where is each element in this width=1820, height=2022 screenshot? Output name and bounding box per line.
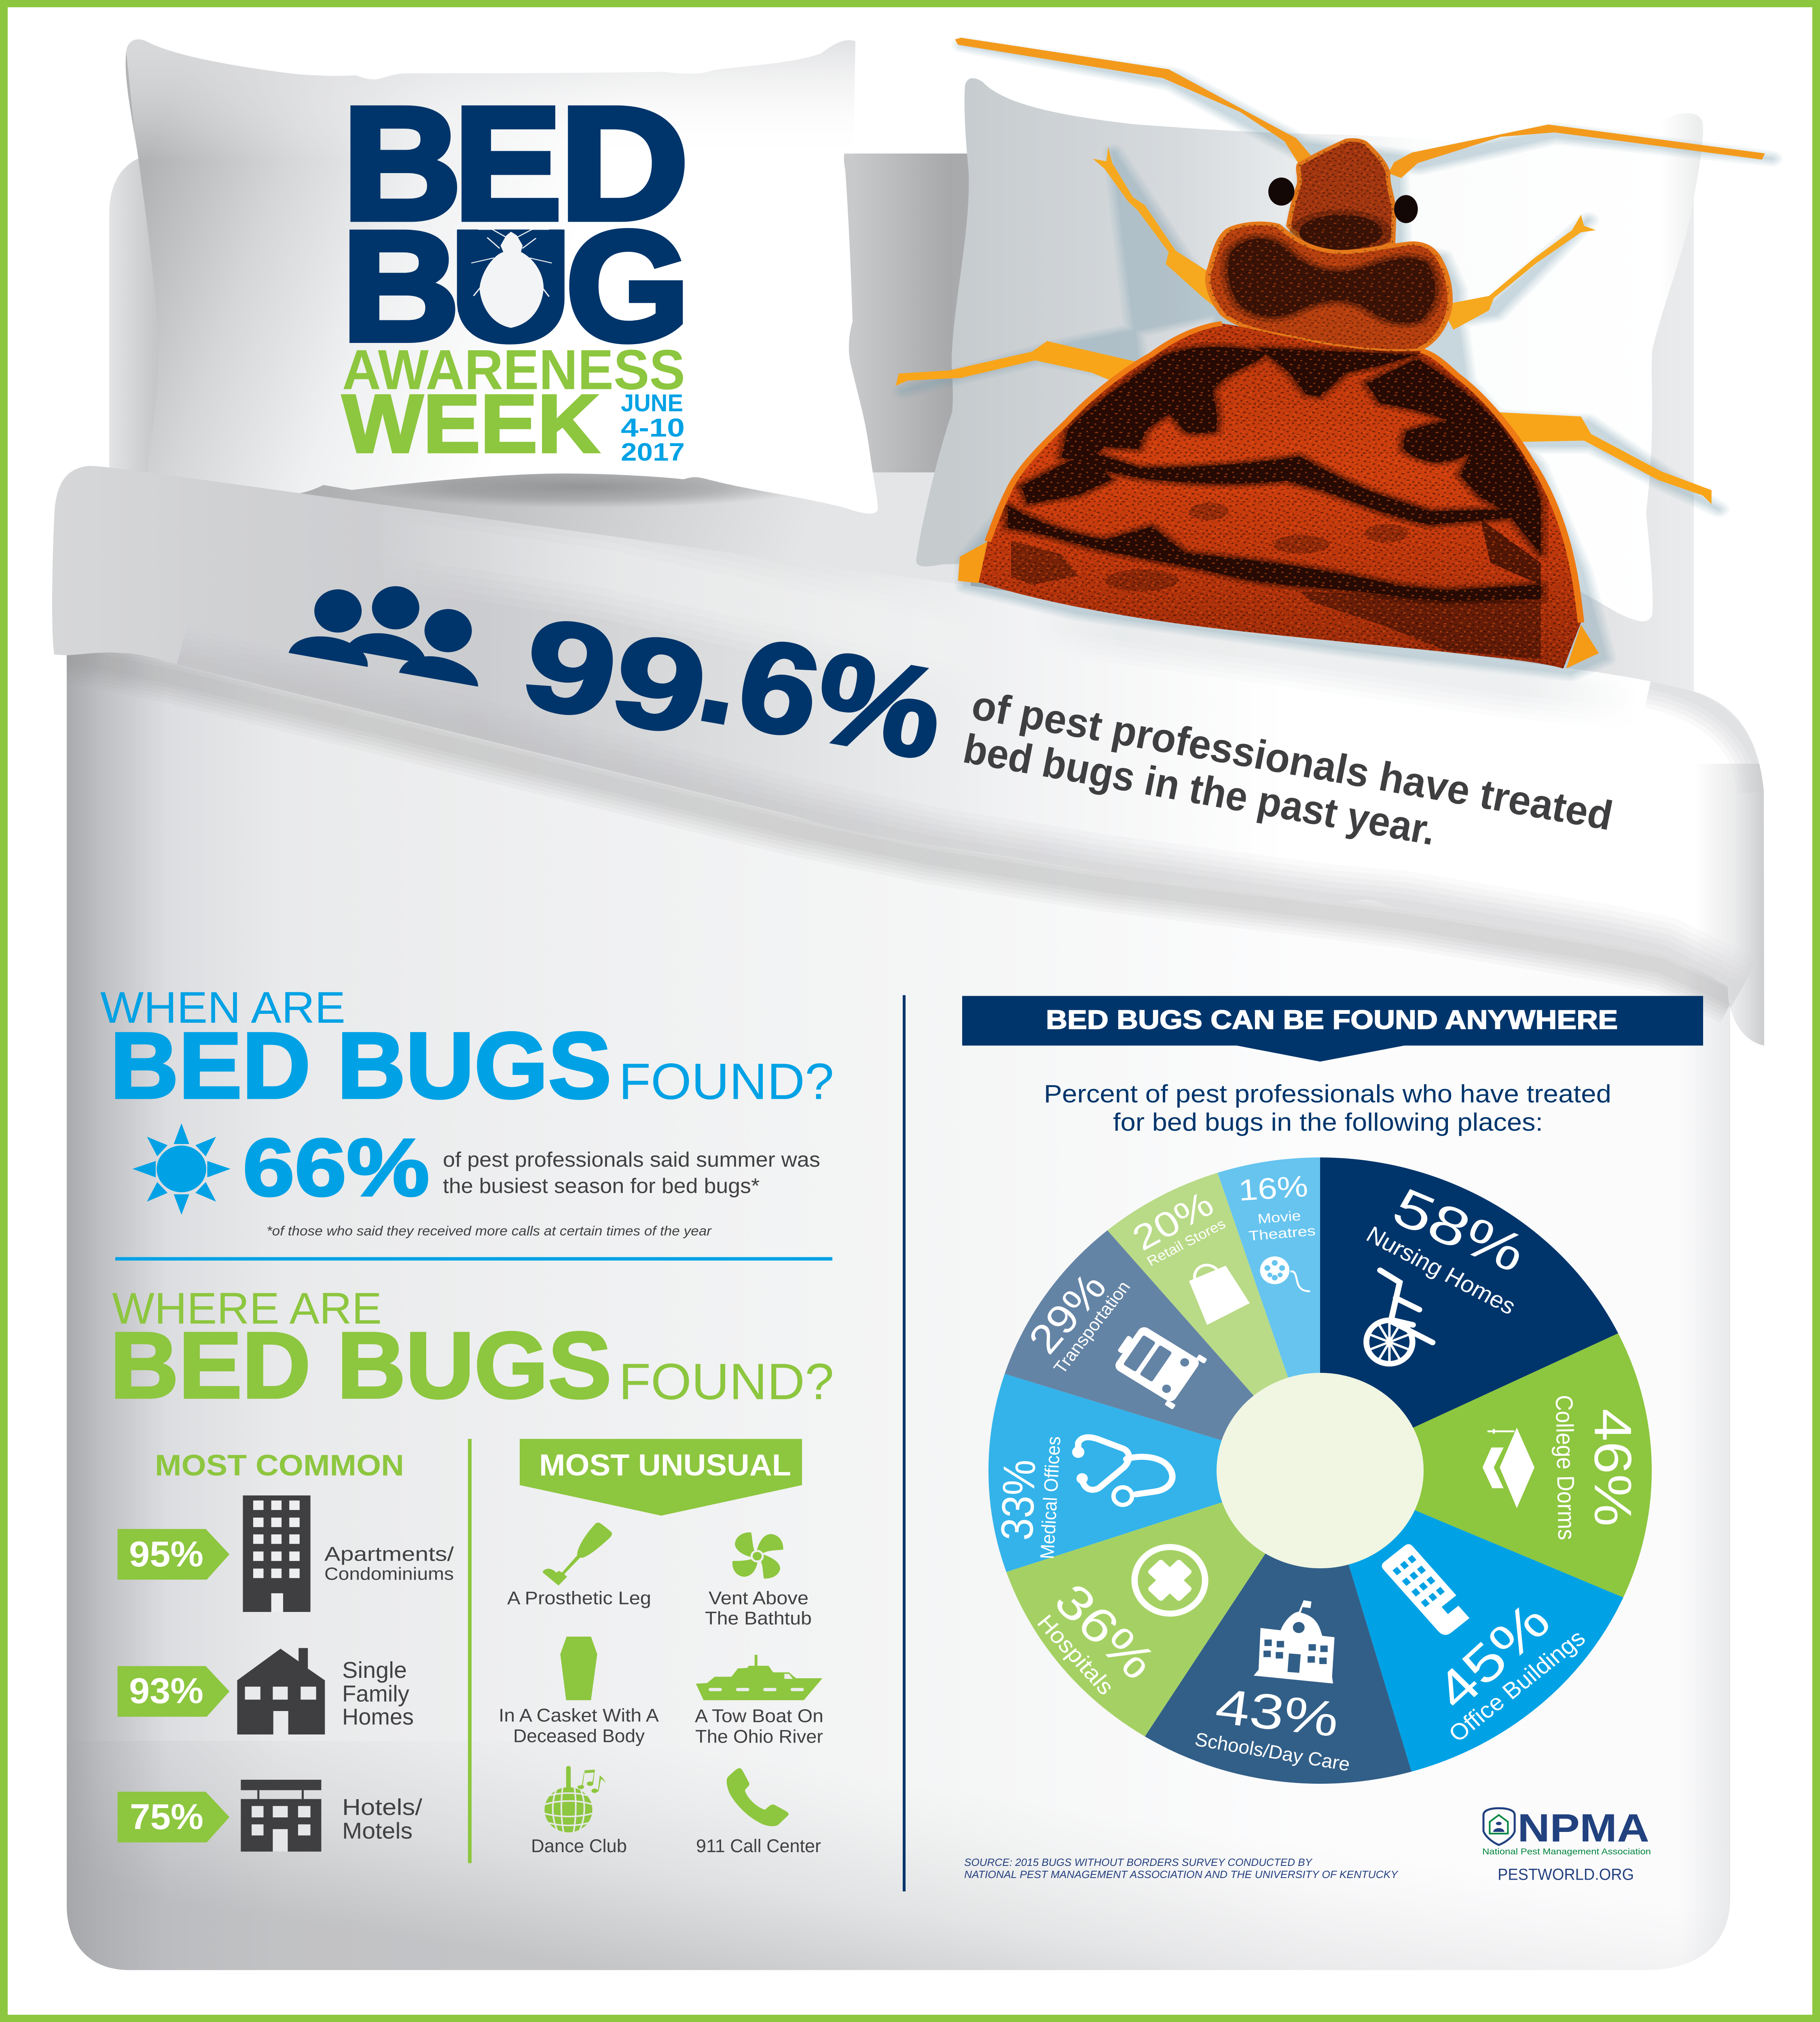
icon: sun	[133, 1123, 231, 1215]
footnote: *of those who said they received more calls at certain times of the year	[267, 1224, 712, 1239]
statistic 99.6%: .6%	[688, 605, 954, 787]
label medical offices	[992, 1436, 1064, 1560]
tag values	[129, 1534, 203, 1837]
pie chart	[988, 1157, 1652, 1784]
label medical offices: 33%	[992, 1459, 1045, 1541]
icon: stethoscope	[1075, 1437, 1172, 1505]
tag values: 93%	[129, 1671, 203, 1711]
slice: schools 43%	[1145, 1470, 1412, 1784]
most unusual labels: A Prosthetic Leg	[507, 1588, 651, 1608]
label retail stores: Retail Stores	[1144, 1216, 1228, 1269]
tag 95	[118, 1529, 229, 1580]
logo word BUG: G	[566, 199, 690, 373]
logo bug silhouette	[471, 229, 552, 328]
NPMA full name: National Pest Management Association	[1482, 1846, 1651, 1856]
slice: medical offices 33%	[988, 1374, 1320, 1572]
bed body	[40, 630, 1733, 1974]
icon: office building	[1380, 1542, 1474, 1638]
slice: college dorms 46%	[1320, 1333, 1652, 1597]
pillow with logo	[126, 39, 878, 530]
bed bug illustration	[896, 38, 1772, 674]
NPMA wordmark: NPMA	[1517, 1806, 1649, 1850]
logo date: 4-10	[621, 413, 685, 442]
logo: Bed Bug Awareness Week	[342, 74, 690, 470]
bug body segments	[979, 140, 1581, 668]
label movie theatres: 16%	[1237, 1170, 1309, 1207]
icon: telephone	[727, 1768, 789, 1826]
icon: disco ball	[544, 1766, 605, 1832]
label movie theatres	[1237, 1170, 1316, 1244]
label hospitals: 36%	[1044, 1573, 1167, 1689]
sheet below pillows	[149, 472, 971, 596]
bottom shading	[40, 649, 1733, 1974]
chart subtitle: for bed bugs in the following places:	[1113, 1108, 1543, 1136]
label college dorms: College Dorms	[1550, 1395, 1580, 1540]
icon: medical cross	[1134, 1547, 1205, 1614]
label medical offices: Medical Offices	[1036, 1436, 1064, 1560]
bug eyes	[1268, 178, 1418, 223]
label hospitals: Hospitals	[1032, 1610, 1120, 1699]
icon: house	[237, 1648, 325, 1734]
statistic 66%: 66%	[243, 1122, 430, 1213]
banner: most unusual	[520, 1439, 802, 1516]
most unusual labels: The Ohio River	[695, 1726, 823, 1747]
most common labels	[324, 1543, 454, 1844]
tag values: 95%	[129, 1534, 203, 1574]
pillow left shape	[126, 39, 878, 530]
summer description	[443, 1148, 820, 1198]
most common icons and tags	[118, 1495, 325, 1852]
icon: vent fan	[732, 1532, 783, 1578]
banner: most unusual: MOST UNUSUAL	[539, 1449, 791, 1482]
label transportation: Transportation	[1050, 1277, 1134, 1377]
slice: nursing homes 58%	[1320, 1157, 1618, 1470]
bug drop shadow	[903, 45, 1772, 674]
label schools: 43%	[1213, 1678, 1342, 1747]
label movie theatres: Movie	[1257, 1208, 1302, 1227]
NPMA logo	[1482, 1806, 1651, 1856]
statistic description: bed bugs in the past year.	[960, 725, 1440, 854]
chart subtitle	[1044, 1080, 1611, 1136]
label transportation	[1019, 1265, 1134, 1377]
icon: graduation cap	[1483, 1428, 1534, 1508]
icon: film reel	[1260, 1256, 1310, 1292]
headboard	[109, 154, 1694, 764]
heading: when are bed bugs found: WHEN ARE	[100, 983, 345, 1032]
heading: when are bed bugs found: FOUND?	[619, 1053, 834, 1110]
label office buildings: Office Buildings	[1444, 1625, 1590, 1747]
icon: casket	[560, 1637, 597, 1700]
logo word BED	[343, 74, 689, 253]
slice: hospitals 36%	[1006, 1470, 1320, 1736]
website: PESTWORLD.ORG	[1498, 1865, 1634, 1883]
source note	[964, 1856, 1399, 1880]
slice: office buildings 45%	[1320, 1470, 1623, 1772]
logo word BED: B	[343, 74, 461, 253]
statistic 99.6%	[512, 590, 954, 787]
source note: NATIONAL PEST MANAGEMENT ASSOCIATION AND THE UNIVERSITY OF KENTUCKY	[964, 1869, 1399, 1880]
most unusual labels: Deceased Body	[513, 1726, 645, 1746]
bug antennae	[955, 38, 1765, 178]
icon: shopping bag	[1189, 1265, 1250, 1325]
label hospitals	[1032, 1573, 1167, 1699]
summer description: of pest professionals said summer was	[443, 1148, 820, 1171]
divider green vertical	[468, 1439, 472, 1863]
slice: retail stores 20%	[1107, 1173, 1320, 1470]
center disc	[1217, 1373, 1424, 1568]
icon: hotel	[241, 1780, 321, 1852]
label college dorms	[1550, 1395, 1642, 1540]
bug head	[1289, 140, 1394, 255]
icon: tow boat	[696, 1655, 822, 1700]
heading: where are bed bugs found	[110, 1284, 834, 1418]
logo date: JUNE	[621, 390, 683, 417]
slice: transportation 29%	[1005, 1230, 1320, 1470]
icon: NPMA shield	[1484, 1808, 1515, 1845]
logo date	[621, 390, 685, 466]
heading: when are bed bugs found: BED BUGS	[110, 1013, 612, 1118]
most common labels: Family	[342, 1681, 410, 1707]
icon: prosthetic leg	[543, 1523, 612, 1586]
most unusual labels: Vent Above	[709, 1588, 808, 1608]
slice: movie theatres 16%	[1218, 1157, 1320, 1470]
logo word BUG: U	[450, 199, 571, 373]
most unusual icons	[543, 1523, 822, 1832]
divider navy vertical	[903, 995, 906, 1891]
label office buildings	[1423, 1591, 1590, 1747]
label movie theatres: Theatres	[1248, 1223, 1316, 1244]
label schools: Schools/Day Care	[1193, 1729, 1352, 1775]
pie icons	[1075, 1256, 1534, 1684]
most common labels: Single	[342, 1658, 407, 1683]
bug legs	[896, 147, 1712, 668]
fold shading	[177, 535, 1764, 1048]
heading: where are bed bugs found: BED BUGS	[110, 1312, 612, 1418]
pie labels	[992, 1170, 1642, 1775]
tag values: 75%	[130, 1797, 203, 1837]
most unusual labels: 911 Call Center	[696, 1836, 821, 1856]
chart subtitle: Percent of pest professionals who have treated	[1044, 1080, 1611, 1108]
icon: bus	[1105, 1318, 1207, 1410]
abdomen orange rim	[988, 324, 1581, 622]
heading: most common: MOST COMMON	[155, 1449, 404, 1482]
tag 93	[118, 1666, 229, 1717]
fold fabric	[52, 466, 1764, 1045]
bug abdomen	[979, 324, 1581, 668]
label retail stores	[1125, 1184, 1228, 1269]
heading: where are bed bugs found: FOUND?	[619, 1353, 834, 1410]
label transportation: 29%	[1019, 1265, 1115, 1362]
most unusual labels: In A Casket With A	[499, 1705, 659, 1726]
label nursing homes: 58%	[1384, 1176, 1535, 1284]
banner: bed bugs can be found anywhere: BED BUGS CAN BE FOUND ANYWHERE	[1046, 1005, 1618, 1034]
logo word BUG: B	[342, 199, 459, 373]
icon: three people	[289, 586, 478, 687]
pillow under bug	[916, 78, 1703, 621]
logo word BUG	[342, 199, 690, 373]
label nursing homes	[1362, 1176, 1535, 1320]
most unusual labels: A Tow Boat On	[695, 1706, 823, 1726]
logo word BED: D	[559, 74, 689, 253]
summer description: the busiest season for bed bugs*	[443, 1174, 760, 1198]
most common labels: Apartments/	[324, 1543, 454, 1565]
logo word WEEK: WEEK	[342, 378, 599, 470]
heading: when are bed bugs found	[100, 983, 834, 1118]
logo word BED: E	[454, 74, 562, 253]
heading: where are bed bugs found: WHERE ARE	[112, 1284, 382, 1333]
statistic 99.6%: 99	[512, 590, 718, 763]
logo date: 2017	[621, 438, 685, 466]
tag 75	[118, 1792, 229, 1842]
most unusual labels: The Bathtub	[705, 1608, 812, 1629]
label office buildings: 45%	[1423, 1591, 1562, 1720]
duvet fold	[52, 466, 1764, 1048]
label nursing homes: Nursing Homes	[1362, 1221, 1520, 1320]
most common labels: Condominiums	[324, 1565, 454, 1584]
banner: bed bugs can be found anywhere	[962, 996, 1703, 1062]
logo word AWARENESS: AWARENESS	[342, 338, 685, 401]
source note: SOURCE: 2015 BUGS WITHOUT BORDERS SURVEY CONDUCTED BY	[964, 1856, 1313, 1868]
label schools	[1193, 1678, 1352, 1775]
pillow shadow	[360, 466, 813, 508]
most common labels: Homes	[342, 1704, 414, 1730]
divider blue	[115, 1257, 832, 1261]
bug thorax	[1208, 224, 1450, 351]
most unusual labels	[499, 1588, 823, 1856]
most unusual labels: Dance Club	[531, 1836, 627, 1856]
label college dorms: 46%	[1584, 1409, 1642, 1527]
pillow top shade	[126, 39, 855, 161]
mattress	[67, 630, 1730, 1970]
icon: school	[1254, 1600, 1335, 1684]
most common labels: Motels	[342, 1818, 413, 1844]
most common labels: Hotels/	[342, 1795, 423, 1820]
label retail stores: 20%	[1125, 1184, 1221, 1258]
icon: wheelchair	[1366, 1270, 1433, 1364]
icon: apartment building	[243, 1495, 311, 1612]
statistic description: of pest professionals have treated	[968, 682, 1617, 839]
